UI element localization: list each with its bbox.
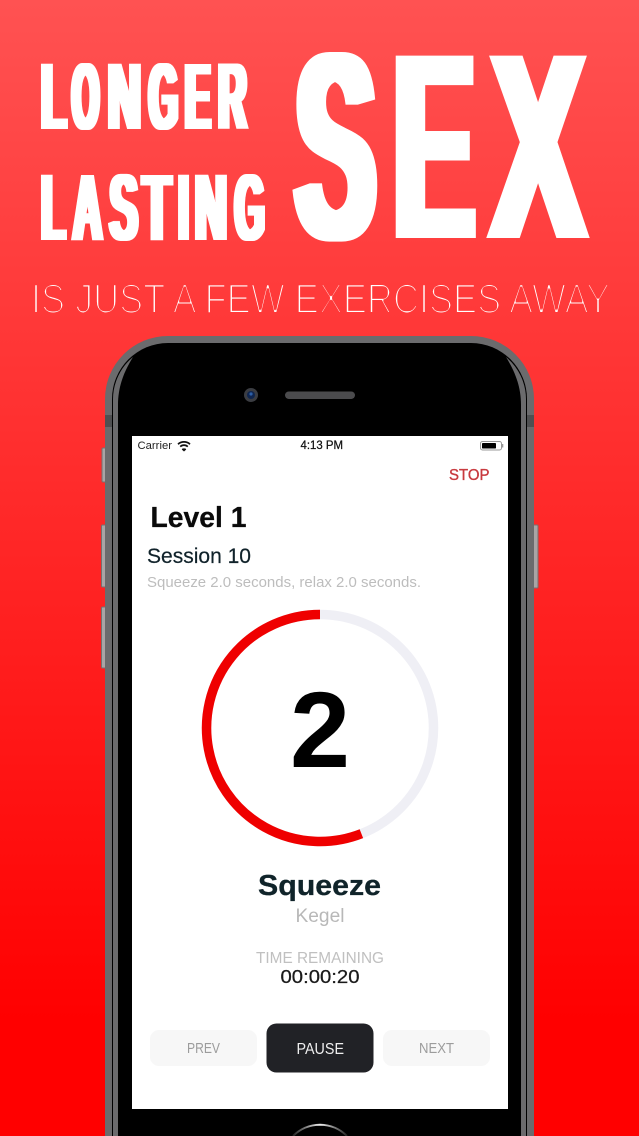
level heading: Level 1 (150, 502, 246, 534)
session heading: Session 10 (147, 544, 251, 568)
headline: longer (41, 44, 247, 150)
phone side buttons (102, 448, 538, 668)
ring track (206, 614, 434, 842)
session instructions: Squeeze 2.0 seconds, relax 2.0 seconds. (147, 575, 421, 591)
headline: lasting (41, 155, 264, 261)
time remaining value: 00:00:20 (280, 967, 360, 987)
home button (293, 1125, 347, 1136)
phone mockup (102, 336, 538, 1136)
headline: longer: L (41, 44, 66, 150)
phone frame (105, 336, 534, 1136)
earpiece speaker (285, 392, 355, 399)
headline: longer: G (149, 44, 178, 150)
headline (41, 0, 586, 295)
ring progress (207, 614, 361, 842)
headline: lasting: S (110, 155, 138, 261)
exercise type: Kegel (296, 906, 344, 927)
headline: sex (296, 0, 586, 295)
headline: lasting: A (73, 155, 102, 261)
headline: R (218, 44, 247, 150)
phone face (112, 343, 527, 1136)
front camera (244, 388, 258, 402)
timer ring (206, 614, 434, 842)
pause button: PAUSE (296, 1041, 344, 1058)
app screen (132, 436, 508, 1109)
headline: sex: S (296, 0, 376, 295)
status bar (138, 440, 503, 452)
headline: G (235, 155, 264, 261)
headline: sex: E (394, 0, 475, 295)
icon: wifi (178, 442, 190, 450)
headline: longer: O (72, 44, 99, 150)
pause button (266, 1024, 374, 1072)
headline: lasting: I (179, 155, 188, 261)
headline: lasting: T (143, 155, 171, 261)
headline: lasting: L (41, 155, 65, 261)
antenna bands (105, 415, 534, 427)
clock: 4:13 PM (300, 440, 343, 452)
headline: lasting: N (195, 155, 227, 261)
icon: battery (480, 442, 503, 450)
next button: NEXT (419, 1040, 454, 1057)
headline: longer: N (108, 44, 141, 150)
prev button (150, 1030, 257, 1066)
exercise name: Squeeze (258, 870, 381, 902)
time remaining label: TIME REMAINING (256, 950, 384, 967)
inner bezel strips (113, 357, 526, 1136)
carrier label: Carrier (138, 440, 172, 452)
next button (383, 1030, 490, 1066)
countdown number: 2 (290, 669, 350, 790)
prev button: PREV (187, 1040, 220, 1057)
stop action: STOP (449, 467, 490, 484)
headline: longer: E (185, 44, 210, 150)
